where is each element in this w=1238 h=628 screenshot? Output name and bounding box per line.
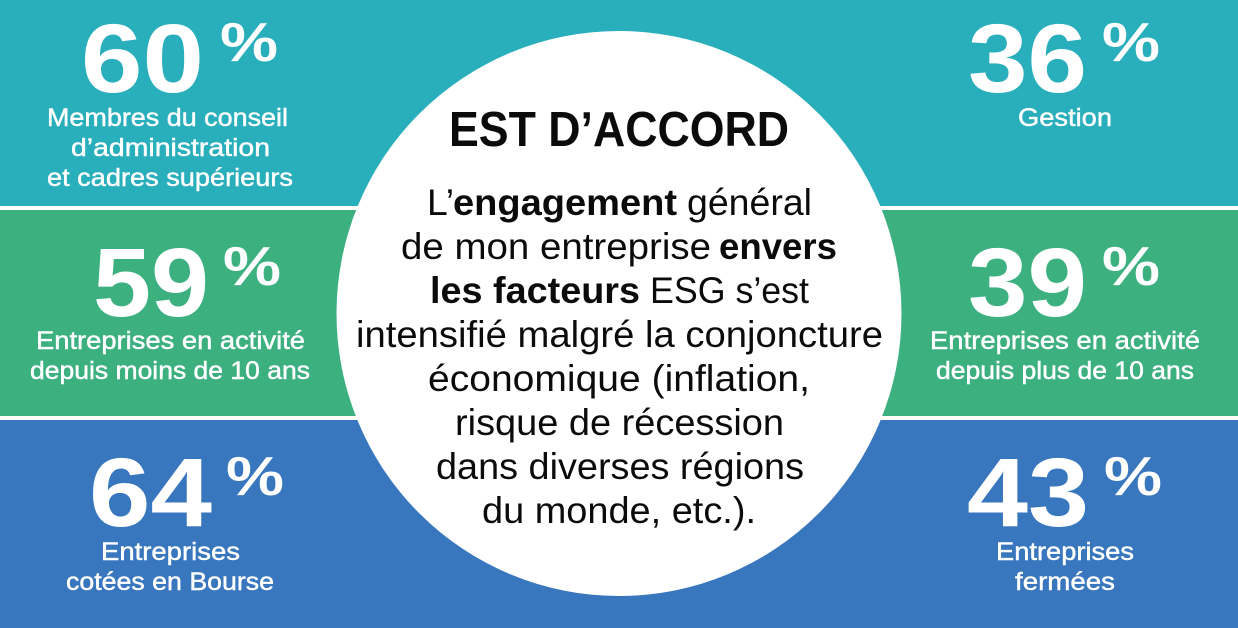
central statement text: engagement [453, 182, 677, 223]
label: fermées [1015, 568, 1115, 596]
label: depuis plus de 10 ans [936, 357, 1194, 385]
central statement text: de mon entreprise [401, 226, 711, 267]
number 43: 43 [967, 438, 1089, 547]
label: Entreprises en activité [930, 327, 1200, 355]
label: Entreprises [101, 538, 240, 566]
label [30, 327, 310, 385]
central statement text: les facteurs [430, 270, 640, 311]
label: Gestion [1018, 104, 1112, 132]
label [66, 538, 274, 596]
percent sign: % [1104, 445, 1162, 507]
stat: 64 % listed companies [66, 438, 284, 596]
central statement text: ESG s’est [650, 270, 810, 311]
central statement text: dans diverses régions [436, 446, 804, 487]
percent sign: % [1102, 11, 1160, 73]
percent sign: % [220, 11, 278, 73]
label: et cadres supérieurs [47, 164, 293, 192]
percent sign: % [1102, 235, 1160, 297]
central white circle [336, 31, 902, 596]
label [47, 104, 293, 192]
label [996, 538, 1134, 596]
label: cotées en Bourse [66, 568, 274, 596]
central statement text: intensifié malgré la conjoncture [356, 314, 883, 355]
number 64: 64 [89, 438, 212, 547]
stat: 43 % private companies [967, 438, 1162, 596]
central statement text: général [687, 182, 812, 223]
central statement text: risque de récession [455, 402, 784, 443]
central statement text: économique (inflation, [428, 358, 810, 399]
heading: est d'accord: EST D’ACCORD [449, 103, 789, 157]
label: Entreprises en activité [36, 327, 305, 355]
stat: 36 % management [968, 4, 1160, 132]
label [930, 327, 1200, 385]
label: Entreprises [996, 538, 1134, 566]
label: Membres du conseil [47, 104, 288, 132]
percent sign: % [223, 235, 281, 297]
panel: teal band [0, 0, 1238, 206]
percent sign: % [226, 445, 284, 507]
stat: 59 % companies under 10 years [30, 228, 310, 385]
central statement text [356, 182, 883, 531]
panel: green band [0, 210, 1238, 416]
number 60: 60 [81, 4, 204, 113]
label: depuis moins de 10 ans [30, 357, 310, 385]
number 59: 59 [93, 228, 209, 337]
stat: 39 % companies over 10 years [930, 228, 1200, 385]
central statement text: envers [719, 226, 837, 267]
number 39: 39 [968, 228, 1087, 337]
stat: 60 % board members and senior executives [47, 4, 293, 192]
panel: blue band [0, 420, 1238, 628]
label: d’administration [71, 134, 270, 162]
number 36: 36 [968, 4, 1087, 113]
central statement text: du monde, etc.). [482, 490, 756, 531]
central statement text: L’ [427, 182, 454, 223]
